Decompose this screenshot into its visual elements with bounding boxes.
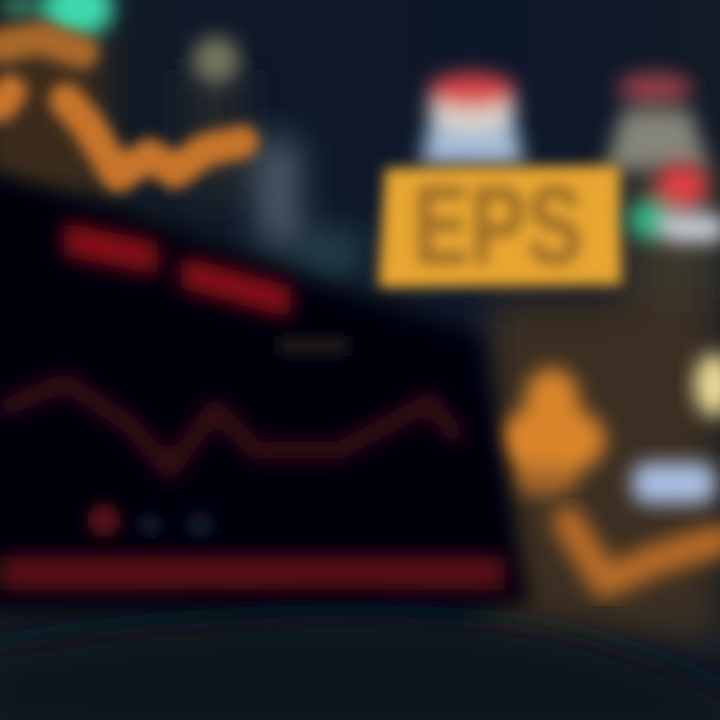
building: right tower <box>490 160 720 640</box>
figure: orange lantern <box>498 368 606 496</box>
glow: teal rooftop light <box>0 0 114 38</box>
dome: left white and red lantern <box>420 73 525 165</box>
footer: red ticker strip <box>0 556 505 590</box>
glow: pale moon light <box>192 36 240 84</box>
dome: right grey and red lantern <box>605 73 708 170</box>
light: blue white sign <box>632 462 716 504</box>
foreground: dark teal desk edge <box>0 617 720 720</box>
line chart: red price line <box>0 382 460 470</box>
glow: orange roofline left <box>0 38 242 176</box>
sign lettering: EPS <box>413 163 583 288</box>
sign: yellow EPS board <box>378 163 622 288</box>
heading: red ticker bars <box>64 222 292 318</box>
light: red white green signal <box>628 164 720 242</box>
light: warm window glow <box>694 353 720 417</box>
panel: dark trading screen <box>0 165 530 610</box>
building: left tower <box>0 30 360 270</box>
glow: orange roofline right <box>568 522 720 582</box>
label: faint screen label <box>278 336 348 356</box>
marker: red dot and blue dots <box>87 503 214 539</box>
